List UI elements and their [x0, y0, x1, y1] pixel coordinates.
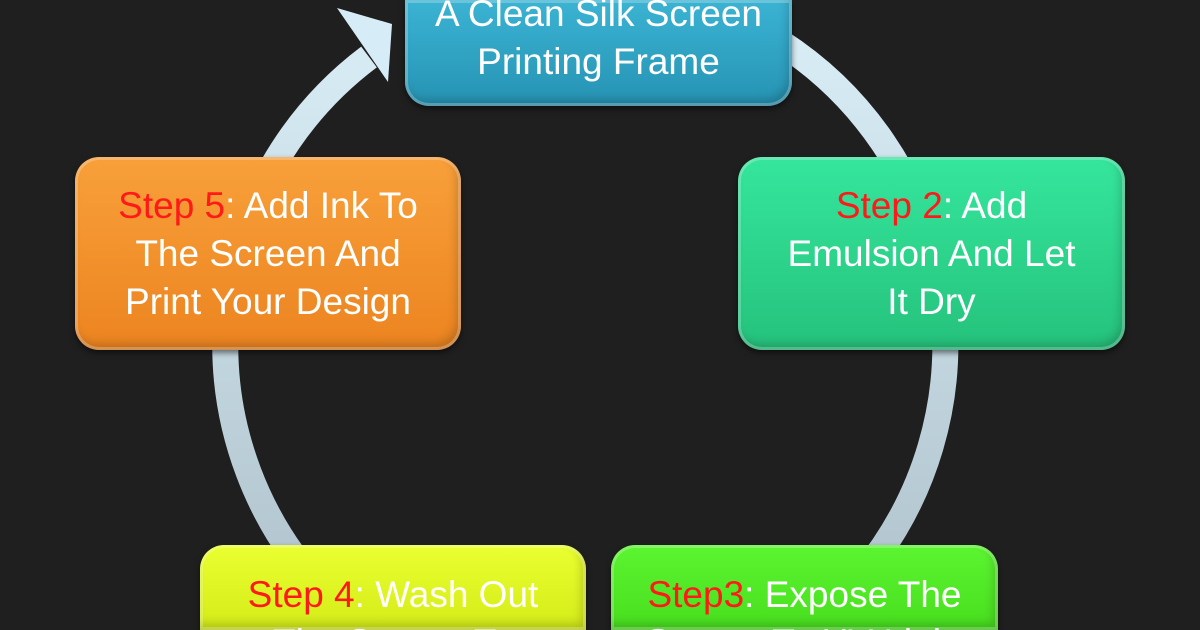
step 1 box: [405, 0, 792, 106]
step 3 box: Step3: Expose The: [647, 574, 962, 615]
step 4 box: Step 4: Wash Out: [248, 574, 538, 615]
step 2 box: [738, 157, 1125, 350]
step 2 box: Emulsion And Let: [788, 232, 1075, 274]
step 5 box: Step 5: Add Ink To: [118, 184, 418, 226]
step 2 box: It Dry: [887, 280, 976, 322]
step 3 box: [611, 545, 998, 630]
step 1 box: Printing Frame: [477, 41, 720, 82]
step 4 box: [200, 545, 586, 630]
step 5 box: [75, 157, 461, 350]
step 5 box: The Screen And: [135, 232, 401, 274]
step 2 box: Step 2: Add: [836, 184, 1027, 226]
step 5 box: Print Your Design: [125, 280, 411, 322]
